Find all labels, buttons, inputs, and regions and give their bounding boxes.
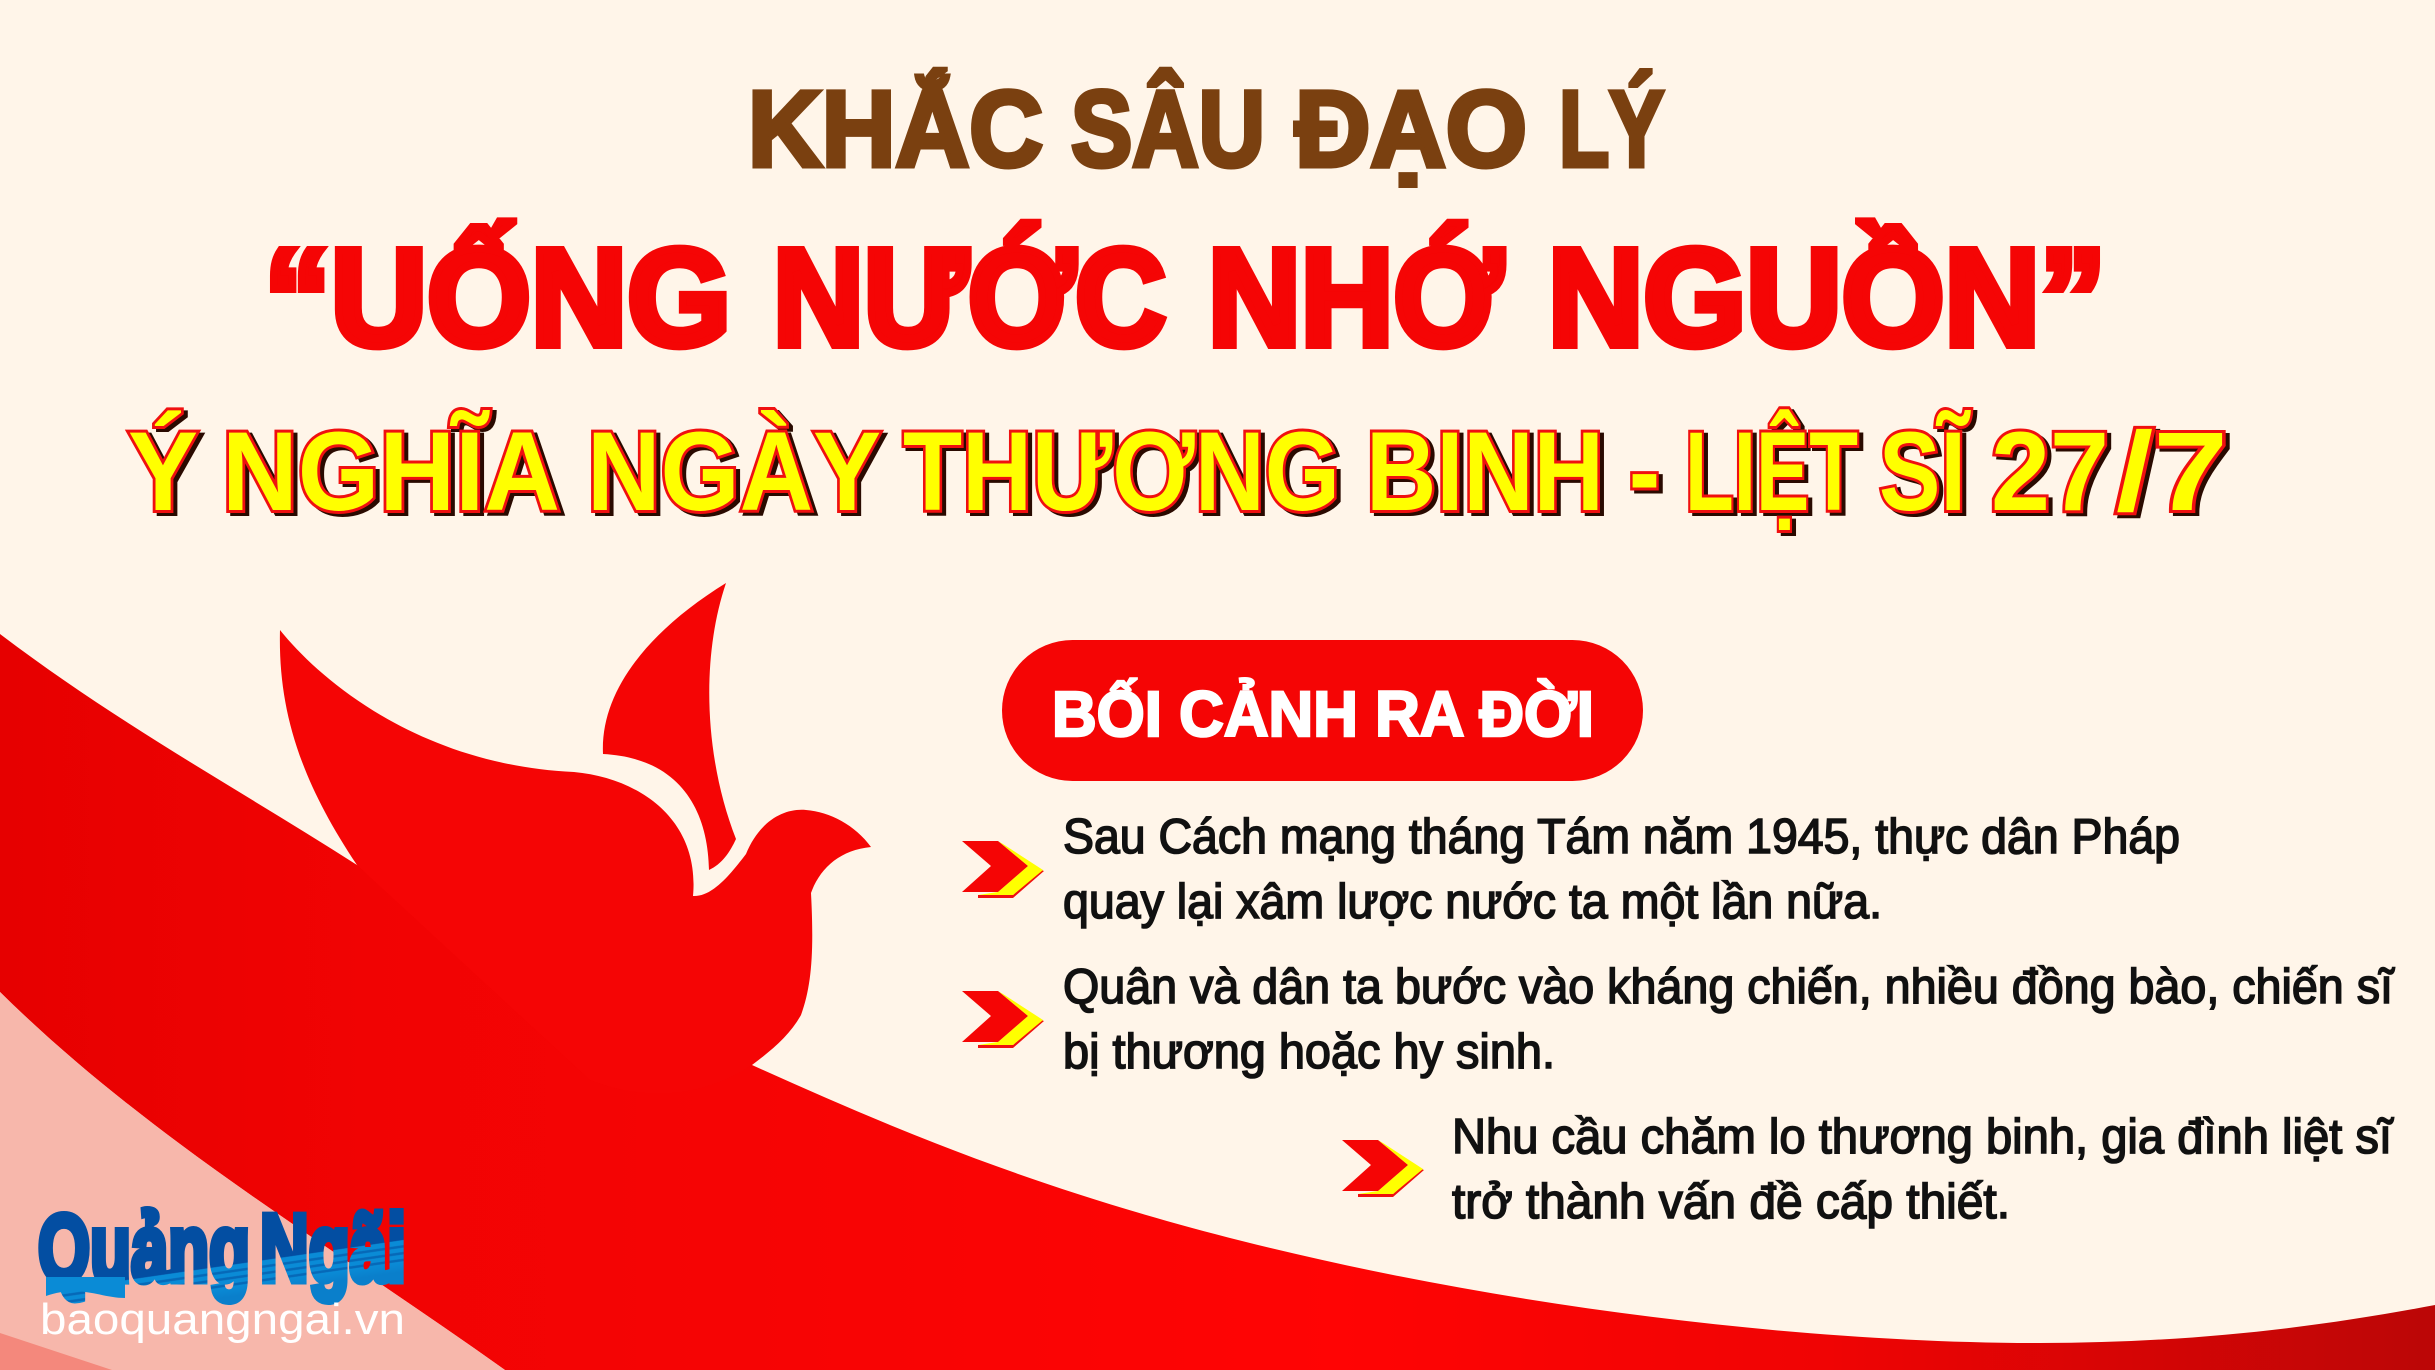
red swoosh band <box>0 634 2435 1370</box>
title: Uống nước nhớ nguồn: NƯỚC <box>773 221 1166 375</box>
subtitle: Ý nghĩa ngày Thương binh - Liệt sĩ 27/7: Ý <box>128 409 198 534</box>
text: bullet 2: bị thương hoặc hy sinh. <box>1063 1025 1555 1079</box>
subtitle: Ý nghĩa ngày Thương binh - Liệt sĩ 27/7 <box>128 409 2232 537</box>
subtitle: Ý nghĩa ngày Thương binh - Liệt sĩ 27/7: NGHĨA <box>222 409 560 534</box>
subtitle: Ý nghĩa ngày Thương binh - Liệt sĩ 27/7: /7 <box>2116 409 2228 534</box>
subtitle: Ý nghĩa ngày Thương binh - Liệt sĩ 27/7: BINH <box>1366 409 1604 534</box>
subtitle: Ý nghĩa ngày Thương binh - Liệt sĩ 27/7: SĨ <box>1879 409 1972 534</box>
title: Khắc sâu đạo lý: LÝ <box>1559 68 1664 189</box>
logo url: baoquangngai.vn: baoquangngai.vn <box>40 1295 405 1344</box>
text: bullet 1 <box>1063 810 2180 929</box>
icon: chevron arrow 2 <box>962 991 1044 1048</box>
title: Uống nước nhớ nguồn: NHỚ <box>1208 221 1503 375</box>
text: bullet 2: Quân và dân ta bước vào kháng chiến, nhiều đồng bào, chiến sĩ <box>1063 960 2395 1014</box>
title: Uống nước nhớ nguồn: NGUỒN” <box>1548 221 2106 375</box>
text: bullet 3: trở thành vấn đề cấp thiết. <box>1452 1175 2010 1229</box>
title: Khắc sâu đạo lý: KHẮC <box>748 68 1043 189</box>
subtitle: Ý nghĩa ngày Thương binh - Liệt sĩ 27/7: Ý <box>132 412 202 537</box>
subtitle: Ý nghĩa ngày Thương binh - Liệt sĩ 27/7: THƯƠNG <box>903 409 1340 534</box>
darker pink corner <box>0 1333 112 1370</box>
subtitle: Ý nghĩa ngày Thương binh - Liệt sĩ 27/7: NGÀY <box>591 412 885 537</box>
subtitle: Ý nghĩa ngày Thương binh - Liệt sĩ 27/7: LIỆT <box>1689 412 1862 537</box>
light pink corner <box>0 992 505 1370</box>
subtitle: Ý nghĩa ngày Thương binh - Liệt sĩ 27/7: - <box>1629 409 1660 534</box>
text: bullet 2 <box>1063 960 2395 1079</box>
icon: chevron arrow 1 <box>962 841 1044 898</box>
title: Khắc sâu đạo lý: SÂU <box>1071 68 1265 189</box>
subtitle: Ý nghĩa ngày Thương binh - Liệt sĩ 27/7: 27 <box>1991 409 2109 534</box>
heading pill: Bối cảnh ra đời: BỐI CẢNH RA ĐỜI <box>1052 677 1594 750</box>
subtitle: Ý nghĩa ngày Thương binh - Liệt sĩ 27/7: SĨ <box>1883 412 1976 537</box>
subtitle: Ý nghĩa ngày Thương binh - Liệt sĩ 27/7: - <box>1633 412 1664 537</box>
text: bullet 3 <box>1452 1110 2394 1229</box>
logo: Quảng Ngãi: Quảng <box>38 1195 250 1302</box>
logo: Quảng Ngãi: Ngãi <box>260 1195 406 1302</box>
subtitle: Ý nghĩa ngày Thương binh - Liệt sĩ 27/7: BINH <box>1370 412 1608 537</box>
subtitle: Ý nghĩa ngày Thương binh - Liệt sĩ 27/7: LIỆT <box>1685 409 1858 534</box>
subtitle: Ý nghĩa ngày Thương binh - Liệt sĩ 27/7: 27 <box>1995 412 2113 537</box>
icon: chevron arrow 3 <box>1342 1140 1424 1197</box>
text: bullet 3: Nhu cầu chăm lo thương binh, gia đình liệt sĩ <box>1452 1110 2394 1164</box>
title: Uống nước nhớ nguồn: “UỐNG <box>264 221 731 375</box>
text: bullet 1: quay lại xâm lược nước ta một lần nữa. <box>1063 875 1882 929</box>
title: Khắc sâu đạo lý: ĐẠO <box>1295 68 1527 189</box>
heading pill: Bối cảnh ra đời <box>1002 640 1643 781</box>
title: Khắc sâu đạo lý <box>748 68 1664 189</box>
subtitle: Ý nghĩa ngày Thương binh - Liệt sĩ 27/7: THƯƠNG <box>907 412 1344 537</box>
subtitle: Ý nghĩa ngày Thương binh - Liệt sĩ 27/7: /7 <box>2120 412 2232 537</box>
subtitle: Ý nghĩa ngày Thương binh - Liệt sĩ 27/7: NGHĨA <box>226 412 564 537</box>
title: Uống nước nhớ nguồn <box>264 221 2106 375</box>
text: bullet 1: Sau Cách mạng tháng Tám năm 1945, thực dân Pháp <box>1063 810 2180 864</box>
subtitle: Ý nghĩa ngày Thương binh - Liệt sĩ 27/7: NGÀY <box>587 409 881 534</box>
icon: dove silhouette <box>280 583 871 1094</box>
